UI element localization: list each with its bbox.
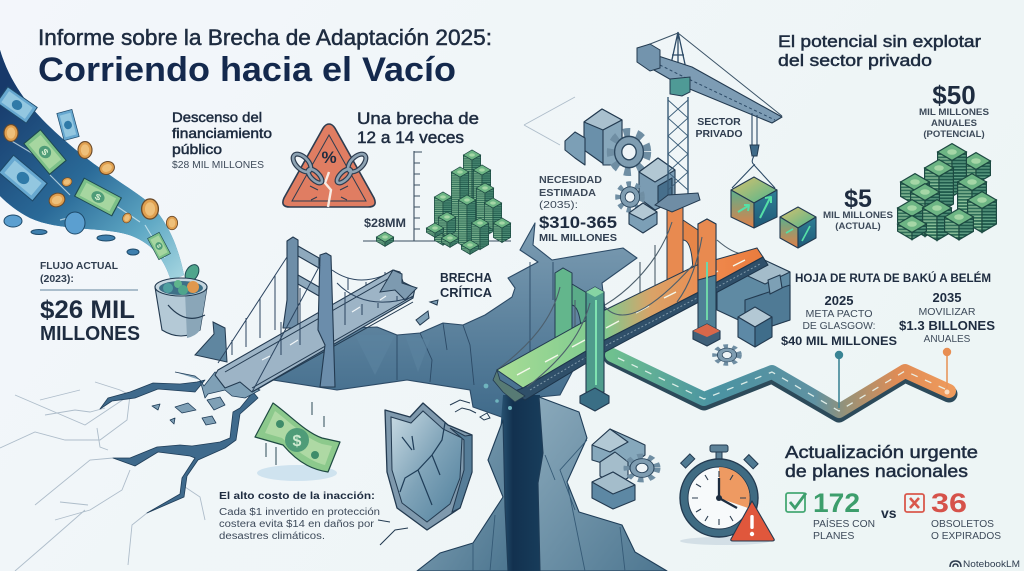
- large crate: [731, 177, 777, 228]
- warning triangle: [731, 501, 774, 541]
- stat: $50: MIL MILLONES: [919, 107, 989, 118]
- road deck: [497, 248, 763, 388]
- orange arch: [683, 220, 698, 272]
- label: vs: vs: [881, 505, 897, 521]
- text: declining public finance: [172, 109, 272, 171]
- heading: private potential: El potencial sin explotar: [778, 32, 981, 51]
- text: current flow: $26 MIL: [40, 296, 135, 324]
- label: critical gap: BRECHA: [440, 270, 493, 285]
- lower blocks and gear near chasm: [592, 429, 657, 509]
- heading: gap: Una brecha de: [357, 109, 479, 128]
- text: estimated need: MIL MILLONES: [539, 232, 617, 244]
- stat: $5: (ACTUAL): [835, 221, 881, 232]
- crane counterweight: [637, 44, 660, 71]
- machinery upper left of crane: [565, 109, 675, 233]
- front green tower: [580, 287, 609, 411]
- stat: $5: [823, 185, 893, 232]
- stat: 172 countries: 172: [813, 488, 860, 518]
- hoist: [752, 113, 757, 146]
- stat: $50: $50: [932, 80, 976, 110]
- front cables: [252, 265, 413, 392]
- label: private sector: SECTOR: [697, 116, 741, 128]
- label: private sector: [695, 116, 743, 140]
- milestone pin 2025: [835, 351, 843, 408]
- text: estimated need: (2035):: [539, 199, 578, 211]
- background terrain hairline cracks: [0, 97, 575, 571]
- money stack chart: [363, 150, 511, 254]
- rear orange tower: [667, 203, 683, 283]
- text: estimated need: $310-365: [539, 213, 617, 232]
- crane tie cables: [640, 33, 782, 116]
- right cliff face: [538, 397, 667, 571]
- stat: $5: $5: [844, 185, 872, 213]
- heading: gap: [357, 109, 479, 147]
- front cables: [527, 237, 702, 387]
- roadmap road: [612, 348, 951, 414]
- roadmap 2035: 2035: [933, 290, 961, 305]
- front tower: [318, 253, 335, 387]
- rear cliff wall of the chasm: [253, 223, 637, 420]
- bridge deck: [215, 270, 415, 392]
- roadmap 2025: 2025: [825, 293, 853, 308]
- text: cost of inaction: costera evita $14 en daños por: [219, 519, 375, 530]
- label: critical gap: [440, 270, 493, 300]
- title: Informe sobre la Brecha de Adaptación 2025:: [38, 25, 492, 50]
- crane cab: [670, 77, 690, 96]
- icon: cracked warning triangle with broken chain: %: [321, 148, 337, 167]
- heading: national plans: de planes nacionales: [785, 461, 968, 481]
- title: [38, 25, 492, 89]
- rear tower: [283, 237, 319, 328]
- rear cables: [218, 257, 395, 363]
- text: cost of inaction: Cada $1 invertido en protección: [219, 507, 380, 518]
- large money bundles: [426, 150, 511, 254]
- money stream: [0, 50, 202, 284]
- crane jib: [640, 50, 782, 123]
- bills and coins: [0, 87, 202, 284]
- roadmap 2025: $40 MIL MILLONES: [781, 334, 897, 348]
- heading: roadmap: HOJA DE RUTA DE BAKÚ A BELÉM: [795, 272, 991, 285]
- stat: $50: ANUALES: [931, 118, 977, 129]
- heading: private potential: [778, 32, 981, 70]
- small money bundle: [376, 232, 394, 246]
- green arch: [572, 284, 587, 342]
- crane base: [655, 193, 700, 212]
- chart axis: [363, 151, 511, 241]
- debris: [416, 300, 438, 325]
- stat: 36 expired: O EXPIRADOS: [931, 530, 1001, 542]
- money stack potential: [898, 144, 996, 240]
- crane mast: [668, 97, 688, 197]
- text: current flow: [40, 260, 140, 345]
- text: cost of inaction: El alto costo de la inacción:: [219, 490, 375, 502]
- stat: 172 countries: PLANES: [813, 530, 854, 542]
- heading: national plans: Actualización urgente: [785, 442, 978, 462]
- ground crack network: [100, 372, 260, 513]
- rear cables: [497, 222, 757, 370]
- text: current flow: MILLONES: [40, 323, 140, 345]
- brand: NotebookLM: NotebookLM: [963, 559, 1020, 570]
- left cliff face: [417, 420, 508, 571]
- right rebuilt bridge: [484, 203, 768, 411]
- front orange tower: [693, 219, 720, 346]
- icon: stopwatch with warning: [680, 445, 774, 545]
- text: estimated need: NECESIDAD: [539, 174, 602, 186]
- stat: $5: MIL MILLONES: [823, 210, 893, 221]
- icon: check box: [786, 493, 806, 512]
- text: estimated need: ESTIMADA: [539, 187, 596, 199]
- text: current flow: FLUJO ACTUAL: [40, 260, 119, 272]
- roadmap 2035: $1.3 BILLONES: [899, 318, 995, 333]
- broken green edge: [493, 370, 525, 402]
- label: private sector: PRIVADO: [695, 128, 743, 140]
- roadmap 2035: MOVILIZAR: [918, 306, 976, 318]
- text: declining public finance: público: [172, 141, 222, 157]
- heading: private potential: del sector privado: [778, 51, 932, 70]
- label: $28MM: $28MM: [364, 218, 406, 230]
- broken chunk near bucket: [195, 322, 227, 362]
- heading: gap: 12 a 14 veces: [357, 128, 464, 147]
- stat: 36 expired: [905, 488, 1001, 542]
- milestone pin 2035: [943, 348, 951, 394]
- stat: 36 expired: 36: [931, 488, 967, 518]
- icon: melting dollar bill: $: [293, 433, 302, 450]
- rear green tower: [555, 268, 572, 355]
- stat: 172 countries: [786, 488, 875, 542]
- stat: $50: [919, 80, 989, 140]
- roadmap 2025: [781, 293, 897, 348]
- title: Corriendo hacia el Vacío: [38, 51, 456, 89]
- left broken bridge: [215, 237, 438, 392]
- roadmap 2035: [899, 290, 995, 345]
- icon: cracked shield: [378, 400, 490, 545]
- icon: cracked warning triangle with broken chain: [283, 124, 375, 207]
- roadmap 2025: DE GLASGOW:: [802, 320, 876, 332]
- text: estimated need: [539, 174, 617, 244]
- text: declining public finance: Descenso del: [172, 109, 262, 125]
- machinery blocks behind bridge: [717, 258, 790, 347]
- stat: 172 countries: PAÍSES CON: [813, 517, 875, 530]
- text: cost of inaction: desastres climáticos.: [219, 531, 325, 542]
- heading: national plans: [785, 442, 978, 481]
- text: current flow: (2023):: [40, 273, 74, 285]
- text: declining public finance: financiamiento: [172, 125, 272, 141]
- icon: melting dollar bill: [255, 402, 340, 481]
- cube: [738, 307, 772, 347]
- label: critical gap: CRÍTICA: [440, 285, 493, 300]
- bridge truss: [512, 257, 768, 400]
- bucket: [155, 278, 207, 338]
- stat: 36 expired: OBSOLETOS: [931, 518, 994, 530]
- text: cost of inaction: [219, 490, 380, 542]
- icon: small gear near road: [715, 346, 739, 364]
- chasm depth: [500, 395, 543, 571]
- small crate: [780, 207, 816, 248]
- text: declining public finance: $28 MIL MILLONES: [172, 160, 264, 171]
- icon: cross box: [905, 494, 924, 512]
- roadmap 2025: META PACTO: [806, 308, 872, 320]
- crane apex: [668, 32, 688, 78]
- crane: [637, 32, 782, 212]
- stat: $50: (POTENCIAL): [923, 129, 985, 140]
- roadmap 2035: ANUALES: [924, 334, 971, 345]
